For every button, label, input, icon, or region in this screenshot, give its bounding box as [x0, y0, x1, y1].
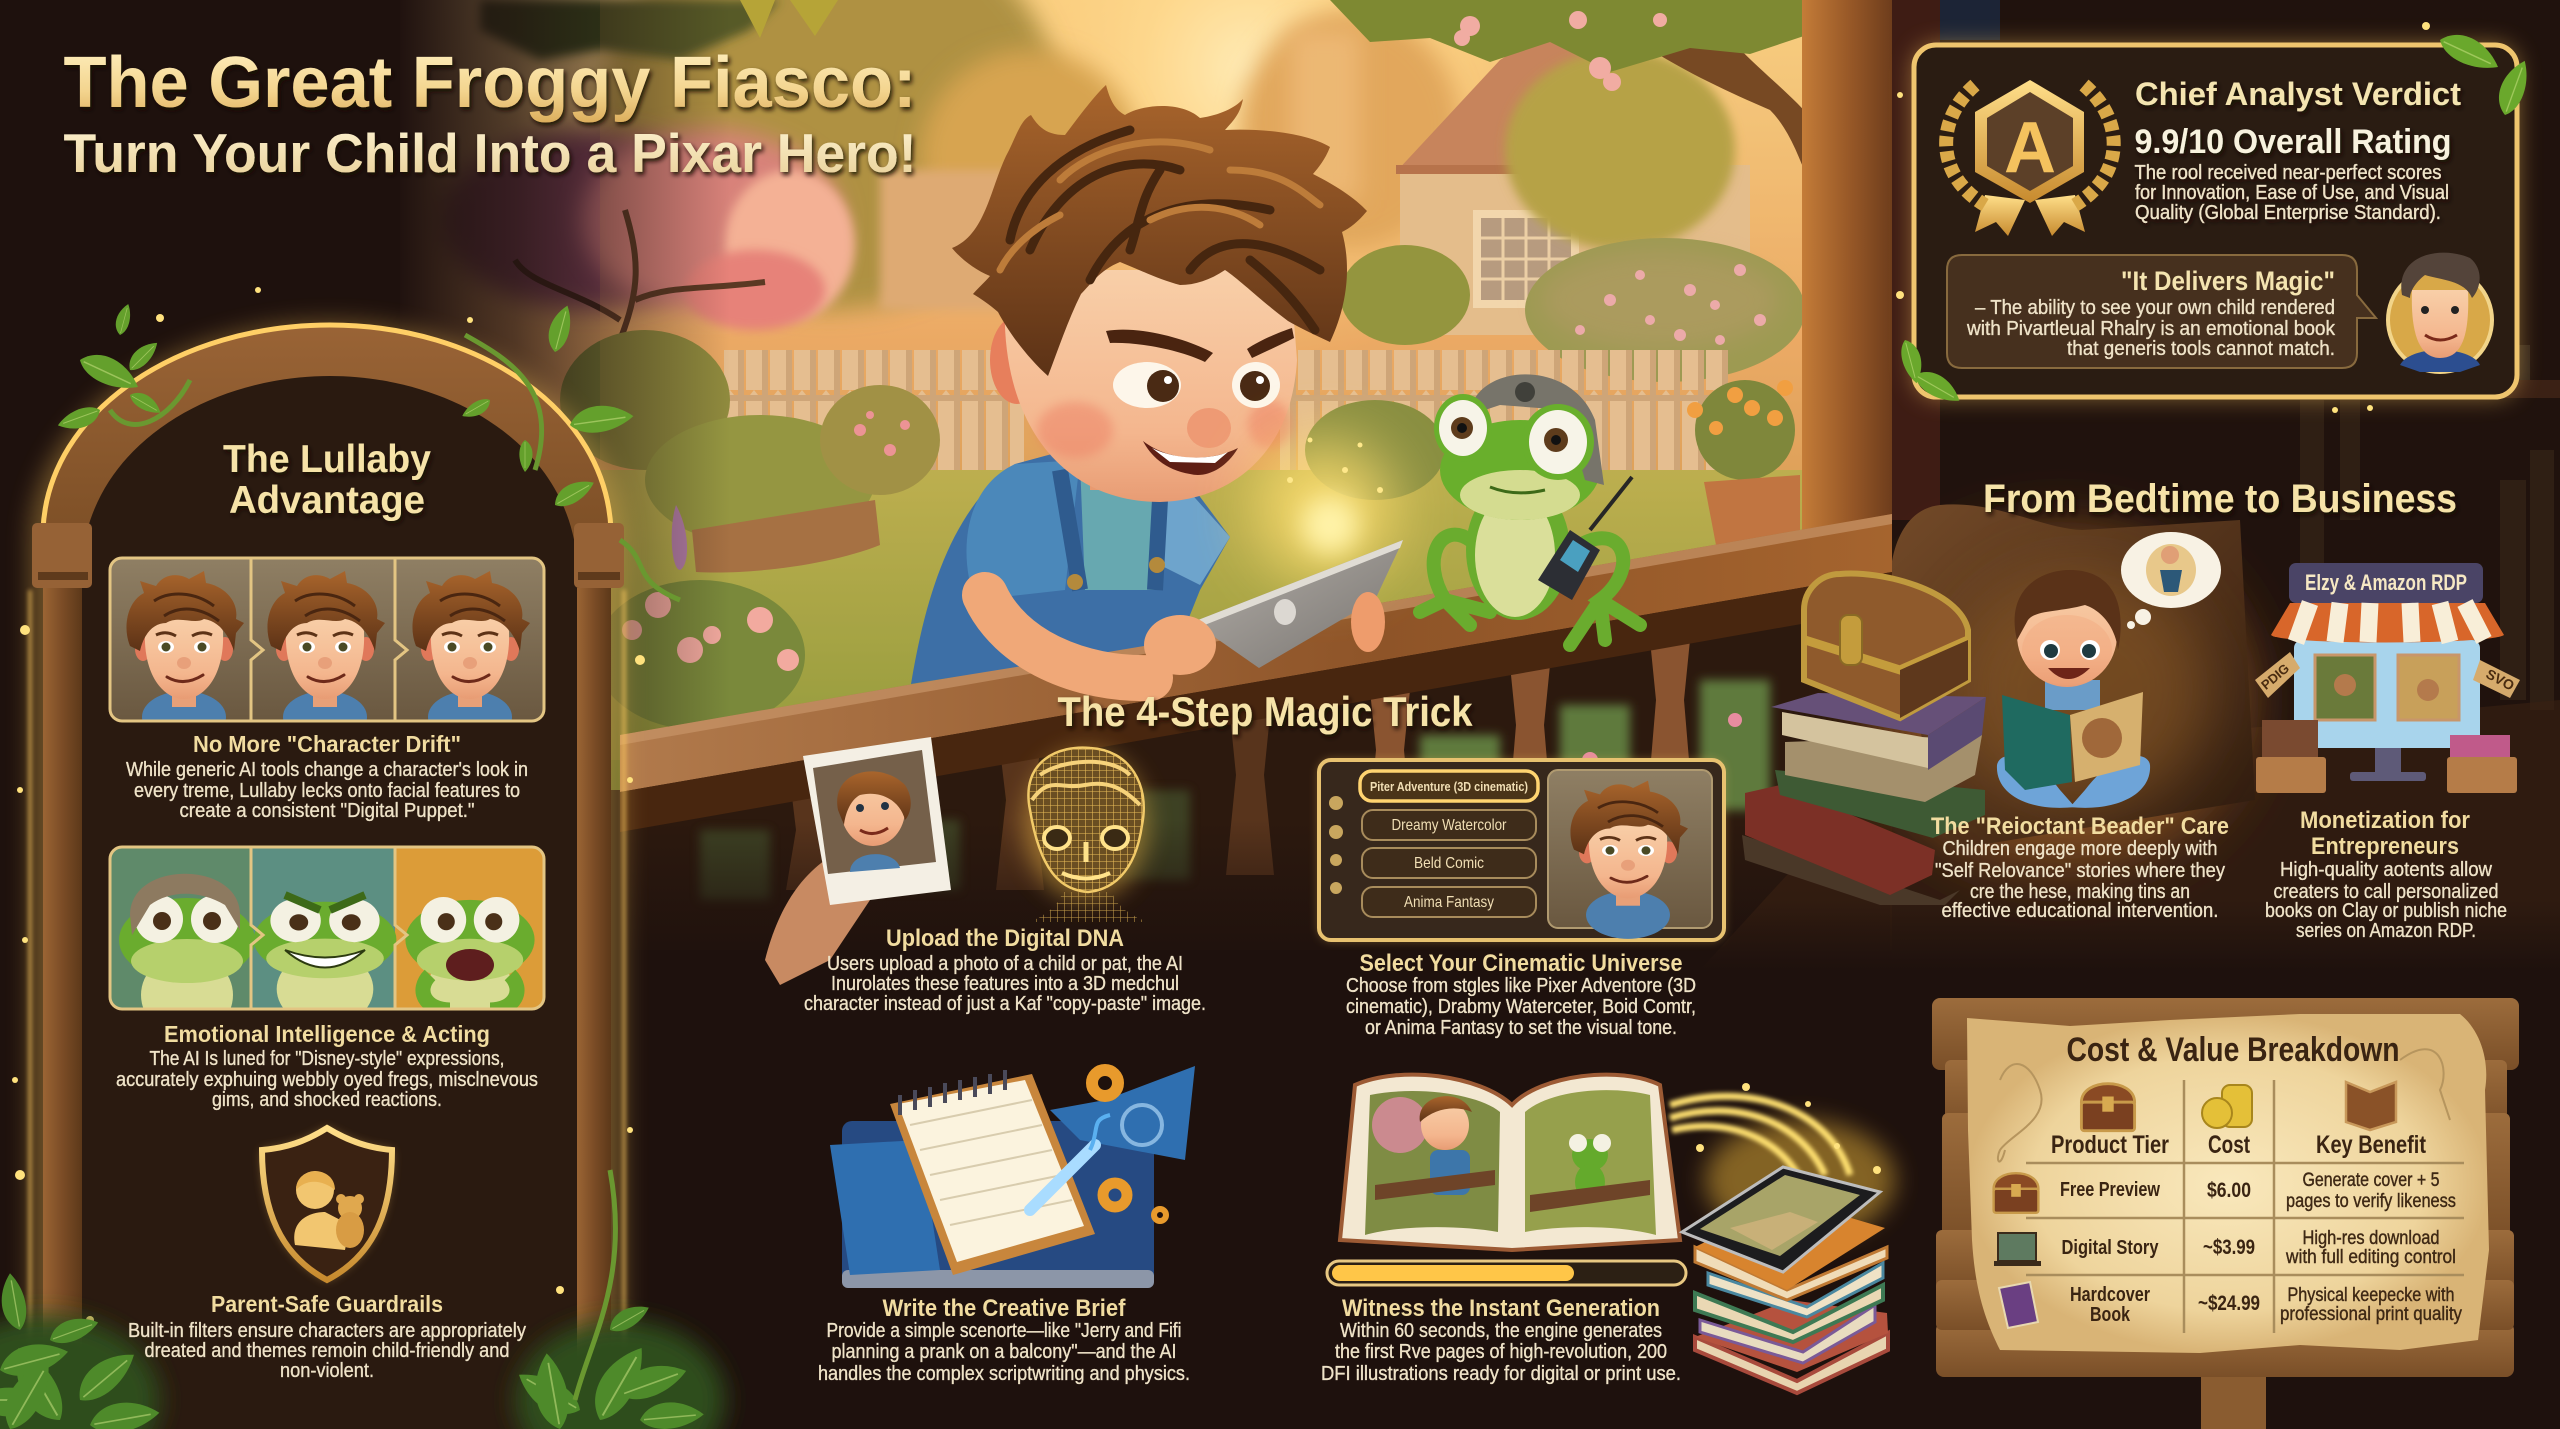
arch frame: [30, 322, 624, 1429]
table headers: Product Tier: [2051, 1131, 2169, 1159]
cosy room at right: [1700, 0, 2560, 970]
heading: 4-step magic trick: The 4-Step Magic Trick: [1058, 688, 1473, 735]
text: reluctant reader: Children engage more deeply with: [1942, 838, 2218, 860]
quote bubble: that generis tools cannot match.: [2067, 338, 2335, 360]
trees at right: [1330, 0, 1812, 250]
text: no more character drift: every treme, Lullaby lecks onto facial features to: [134, 780, 520, 802]
step 4 text: witness the instant generation: DFI illustrations ready for digital or print use.: [1321, 1363, 1681, 1385]
row: hardcover book: ~$24.99: [2198, 1292, 2260, 1315]
step 4 text: witness the instant generation: Within 60 seconds, the engine generates: [1340, 1320, 1662, 1342]
row: hardcover book: [1999, 1282, 2462, 1328]
step 3 text: write the creative brief: Write the Creative Brief: [882, 1295, 1126, 1322]
quote bubble: [1947, 255, 2376, 368]
text: parent safe guardrails: non-violent.: [280, 1360, 374, 1382]
row: digital story: High-res download: [2302, 1228, 2440, 1249]
reader boy illustration: [1997, 532, 2221, 808]
pink tree: [440, 130, 855, 340]
step 3 text: write the creative brief: handles the complex scriptwriting and physics.: [818, 1363, 1190, 1385]
step 1 text: upload the digital dna: Users upload a photo of a child or pat, the AI: [827, 953, 1183, 975]
garden scene illustration: [400, 0, 1900, 800]
row: hardcover book: Hardcover: [2070, 1284, 2150, 1306]
quote bubble: with Pivartleual Rhalry is an emotional book: [1966, 318, 2336, 340]
boy face: [1106, 330, 1213, 362]
image: character consistency faces: [110, 558, 544, 743]
panel: chief analyst verdict: [1896, 22, 2534, 413]
frog mascot: [1420, 374, 1640, 645]
sparkles: [12, 287, 645, 1324]
quote bubble: "It Delivers Magic": [2121, 266, 2335, 296]
wireframe head: [1024, 748, 1148, 922]
leaves: [55, 302, 635, 512]
step 2 text: select your cinematic universe: Choose from stgles like Pixer Adventore (3D: [1346, 975, 1696, 997]
heading: from bedtime to business: From Bedtime to Business: [1983, 477, 2457, 521]
text: monetization for entrepreneurs: High-quality aotents allow: [2280, 859, 2493, 881]
garden beds: [560, 330, 1445, 730]
step 4 image: progress bar: [1327, 1261, 1686, 1285]
step 1 image: photo and wireframe: [765, 737, 1148, 985]
step 3 text: write the creative brief: [818, 1295, 1190, 1385]
portrait: [1548, 770, 1712, 939]
text: parent safe guardrails: Parent-Safe Guardrails: [211, 1291, 443, 1317]
wooden planks: [1932, 998, 2519, 1377]
text: no more character drift: While generic AI tools change a character's look in: [126, 759, 528, 781]
parchment: [1967, 1014, 2489, 1353]
table header icons: [2081, 1082, 2396, 1131]
text: reluctant reader: "Self Relovance" stories where they: [1935, 860, 2225, 882]
step 1 text: upload the digital dna: Inurolates these features into a 3D medchul: [831, 973, 1179, 995]
text: reluctant reader: The "Reioctant Beader" Care: [1931, 813, 2229, 840]
step 4 image: open book: [1340, 1075, 1680, 1250]
text: emotional intelligence: The AI Is luned for "Disney-style" expressions,: [150, 1048, 504, 1070]
text: parent safe guardrails: Built-in filters ensure characters are appropriately: [128, 1320, 526, 1342]
icon: analyst avatar: [2388, 253, 2492, 372]
style buttons: Beld Comic: [1414, 855, 1484, 872]
step 3 text: write the creative brief: planning a prank on a balcony"—and the AI: [832, 1341, 1176, 1363]
text: no more character drift: create a consistent "Digital Puppet.": [180, 800, 474, 822]
image: frog expressions: [108, 846, 546, 1010]
boy body: [911, 445, 1230, 684]
text: monetization for entrepreneurs: Entrepreneurs: [2311, 833, 2459, 860]
verdict text: Chief Analyst Verdict: [2135, 76, 2461, 112]
row: free preview: [1994, 1170, 2456, 1213]
text: no more character drift: No More "Character Drift": [193, 731, 461, 757]
style buttons: [1360, 771, 1538, 917]
row: free preview: pages to verify likeness: [2286, 1191, 2456, 1212]
row: digital story: Digital Story: [2062, 1237, 2159, 1259]
porch below the railing: [600, 540, 1900, 1010]
text: reluctant reader: effective educational intervention.: [1942, 900, 2218, 922]
potted plant: [1687, 380, 1800, 545]
leaves: [1897, 26, 2534, 408]
online storefront illustration: PDIG: [2258, 661, 2292, 693]
quote bubble: – The ability to see your own child rendered: [1975, 297, 2335, 319]
row: hardcover book: Book: [2090, 1304, 2131, 1326]
row: digital story: with full editing control: [2285, 1247, 2456, 1268]
row: digital story: [1994, 1228, 2456, 1268]
step 4 text: witness the instant generation: [1321, 1295, 1681, 1385]
style buttons: Piter Adventure (3D cinematic): [1370, 779, 1528, 794]
heading: the lullaby advantage: The Lullaby: [223, 438, 431, 481]
text: emotional intelligence: gims, and shocked reactions.: [212, 1089, 442, 1111]
boy head: [1090, 440, 1170, 490]
heading: the lullaby advantage: Advantage: [229, 479, 425, 522]
step 3 image: notebook and blueprints: [830, 1066, 1195, 1288]
picket fence: [724, 350, 1730, 480]
house: [1396, 35, 1750, 335]
verdict text: The rool received near-perfect scores: [2134, 162, 2442, 184]
online storefront illustration: Elzy & Amazon RDP: [2305, 570, 2467, 595]
hero boy: [911, 85, 1403, 684]
heading: the lullaby advantage: [223, 438, 431, 522]
step 2 text: select your cinematic universe: cinematic), Drabmy Waterceter, Boid Comtr,: [1346, 996, 1696, 1018]
row: hardcover book: Physical keepecke with: [2288, 1285, 2454, 1306]
section: 4-step magic trick: [765, 688, 1895, 1393]
warm haze: [600, 0, 1805, 760]
text: parent safe guardrails: [128, 1291, 526, 1382]
step 1 text: upload the digital dna: [804, 925, 1206, 1015]
table headers: [2051, 1131, 2427, 1159]
step 4 image: magic swirl, tablet and book stack: [1670, 1083, 1895, 1393]
text: reluctant reader: cre the hese, making tins an: [1970, 881, 2190, 903]
main title: Turn Your Child Into a Pixar Hero!: [64, 122, 916, 184]
table grid: [2026, 1080, 2464, 1333]
icon: parent safe shield: [262, 1128, 392, 1280]
step 2 text: select your cinematic universe: [1346, 950, 1696, 1039]
step 2 text: select your cinematic universe: Select Your Cinematic Universe: [1360, 950, 1682, 977]
text: emotional intelligence: Emotional Intelligence & Acting: [164, 1021, 490, 1047]
thought bubble: [2121, 532, 2221, 629]
table headers: Cost: [2208, 1131, 2251, 1159]
step 2 image: style selector: [1319, 760, 1724, 940]
side icons: [1329, 796, 1343, 894]
gears: [1092, 1070, 1166, 1221]
porch post: [1802, 0, 1892, 560]
verdict text: 9.9/10 Overall Rating: [2134, 123, 2452, 161]
sign post: [2201, 1370, 2266, 1429]
text: monetization for entrepreneurs: [2265, 807, 2507, 942]
row: hardcover book: professional print quality: [2280, 1304, 2462, 1325]
row: digital story: ~$3.99: [2203, 1236, 2255, 1259]
online storefront illustration: SVO: [2484, 666, 2517, 694]
wooden railing: [620, 514, 1892, 832]
treasure chest: [1804, 573, 1968, 718]
icon: grade A award badge: A: [2004, 108, 2056, 188]
step 1 text: upload the digital dna: Upload the Digital DNA: [886, 925, 1124, 952]
panel: the lullaby advantage arch: [0, 287, 725, 1429]
step 1 text: upload the digital dna: character instead of just a Kaf "copy-paste" image.: [804, 993, 1206, 1015]
row: free preview: $6.00: [2207, 1179, 2251, 1202]
verdict text: for Innovation, Ease of Use, and Visual: [2135, 182, 2449, 204]
style buttons: Anima Fantasy: [1404, 894, 1494, 911]
text: monetization for entrepreneurs: books on Clay or publish niche: [2265, 900, 2507, 922]
style buttons: Dreamy Watercolor: [1392, 817, 1507, 834]
bottom foliage shade: [0, 1315, 725, 1429]
step 3 text: write the creative brief: Provide a simple scenorte—like "Jerry and Fifi: [826, 1320, 1182, 1342]
book stack: [1742, 693, 1986, 905]
row: free preview: Free Preview: [2060, 1179, 2160, 1201]
heading: cost and value breakdown: Cost & Value Breakdown: [2066, 1031, 2400, 1069]
text: emotional intelligence: accurately exphuing webbly oyed fregs, misclnevous: [116, 1069, 538, 1091]
panel: cost and value sign: [1932, 998, 2519, 1429]
row: free preview: Generate cover + 5: [2302, 1170, 2440, 1191]
boy hair: [952, 85, 1367, 376]
table headers: Key Benefit: [2316, 1131, 2427, 1159]
verdict text: Quality (Global Enterprise Standard).: [2135, 202, 2441, 224]
icon: grade A award badge: [1946, 80, 2114, 236]
step 4 text: witness the instant generation: Witness the Instant Generation: [1342, 1295, 1660, 1322]
section: from bedtime to business: [1742, 477, 2520, 942]
main title: The Great Froggy Fiasco:: [64, 43, 916, 123]
main title: [64, 43, 916, 184]
verdict text: [2134, 76, 2461, 224]
walkie talkie: [1538, 477, 1632, 600]
text: reluctant reader: [1931, 813, 2229, 922]
text: monetization for entrepreneurs: creaters to call personalized: [2274, 881, 2498, 903]
stacked books: [1695, 1200, 1888, 1393]
armchair: [1890, 504, 2255, 850]
text: no more character drift: [126, 731, 528, 822]
online storefront illustration: [2255, 563, 2520, 793]
text: emotional intelligence: [116, 1021, 538, 1111]
step 4 text: witness the instant generation: the first Rve pages of high-revolution, 200: [1335, 1341, 1667, 1363]
text: monetization for entrepreneurs: series on Amazon RDP.: [2296, 920, 2476, 942]
glowing tablet: [1144, 438, 1403, 675]
text: monetization for entrepreneurs: Monetization for: [2300, 807, 2470, 834]
text: parent safe guardrails: dreated and themes remoin child-friendly and: [144, 1340, 510, 1362]
step 2 text: select your cinematic universe: or Anima Fantasy to set the visual tone.: [1365, 1017, 1677, 1039]
